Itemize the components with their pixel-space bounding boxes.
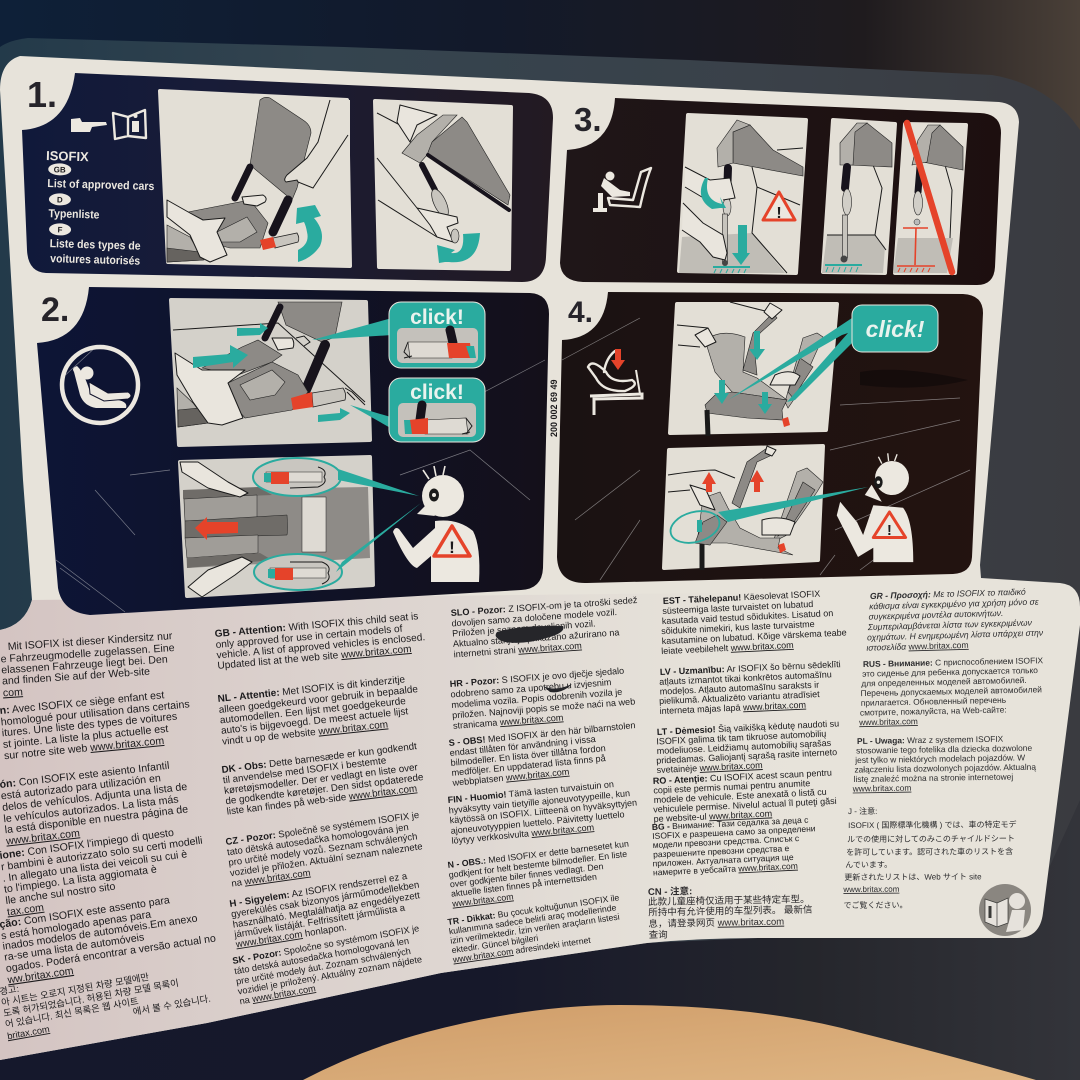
Lithuanian warning: svetainėje www.britax.com [656, 760, 763, 775]
ISOFIX car list legend: voitures autorisés [50, 253, 140, 268]
Japanese warning: でご覧ください。 [843, 900, 908, 910]
Norwegian warning: aktuelle listen finnes på internettsiden [450, 871, 597, 899]
Latvian warning: modeļos. Atļauto automašīnu saraksts ir [660, 680, 819, 697]
Hungarian warning [228, 869, 428, 951]
Slovenian warning: dovoljen samo za določene modele vozil. [451, 607, 617, 628]
Turkish warning: ektedir. Güncel bilgileri [451, 933, 539, 955]
warning triangle [763, 192, 795, 220]
Korean warning: 도록 허가되었습니다. 허용된 차량 모델 목록이 [2, 977, 179, 1019]
Greek warning: κάθισμα είναι εγκεκριμένο για χρήση μόνο σε [869, 597, 1039, 611]
callout: click upper: click! [410, 306, 464, 329]
German warning: e Fahrzeugmodelle zugelassen. Eine [0, 642, 175, 665]
Estonian warning: sõidukite nimekiri, kus laste turvaistme [661, 619, 815, 636]
German warning [0, 630, 180, 699]
Hungarian warning: www.britax.com honlapon. [235, 922, 347, 950]
Portuguese warning [0, 888, 221, 987]
Korean warning: britax.com [6, 1024, 51, 1041]
callout: click upper [312, 302, 485, 368]
illustration: lift the ISOFIX arm [160, 91, 350, 266]
Greek warning [865, 586, 1046, 653]
red arrow left [195, 517, 238, 540]
Estonian warning: süsteemiga laste turvaistet on lubatud [662, 599, 813, 616]
Slovenian warning: Aktualno stanje je prikazano ažurirano na [453, 627, 621, 649]
Dutch warning: automodellen. Een lijst met goedgekeurde [219, 696, 407, 726]
teal curved arrow up [296, 205, 322, 262]
Dutch warning: vindt u op de website www.britax.com [222, 719, 389, 748]
Hungarian warning: használható. Megtalálhatja az engedélyezett [232, 890, 421, 931]
Turkish warning [446, 892, 628, 965]
English warning: only approved for use in certain models of [215, 624, 403, 651]
English warning: vehicle. A list of approved vehicles is enclosed. [216, 632, 426, 661]
Slovak warning: vozidiel je priložený. Aktuálny zoznam nájdete [237, 954, 423, 996]
Italian warning: lle anche sul nostro sito [5, 881, 116, 907]
Slovenian warning: internetni strani www.britax.com [453, 640, 582, 659]
Lithuanian warning: LT - Dėmesio! Šią vaikišką kėdutę naudoti su [657, 718, 839, 737]
Lithuanian warning: modeliuose. Leidžiamų automobilių sąrašas [657, 738, 832, 756]
Finnish warning: hyväksytty vain tietyille ajoneuvotyypeille, kun [448, 788, 630, 815]
Russian warning: Перечень допускаемых моделей автомобилей [860, 684, 1042, 698]
warnings column 2 [214, 611, 430, 1006]
illustration: lower carrier onto base [670, 302, 855, 436]
Greek warning: GR - Προσοχή: Με το ISOFIX το παιδικό [870, 587, 1026, 601]
Bulgarian warning: ISOFIX е разрешена само за определени [652, 823, 816, 841]
Swedish warning: webbplatsen www.britax.com [452, 767, 570, 788]
Italian warning: r bambini è autorizzato solo su certi modelli [0, 835, 203, 873]
panel 2: click the ISOFIX connectors [37, 287, 549, 615]
French warning [0, 687, 196, 762]
Korean warning: 아 시트는 오로지 지정된 차량 모델에만 [0, 971, 150, 1008]
ISOFIX car list legend: GB [54, 165, 66, 175]
Spanish warning: la está disponible en nuestra página de [4, 803, 189, 836]
French warning: homologué pour utilisation dans certains [0, 698, 190, 728]
Swedish warning [447, 720, 642, 788]
Bulgarian warning: BG - Внимание: Тази седалка за деца с [652, 815, 809, 832]
Spanish warning: está autorizado para utilización en [0, 772, 161, 802]
Polish warning: załączeniu lista dozwolonych pojazdów. Aktualną [854, 762, 1036, 775]
Latvian warning: LV - Uzmanību: Ar ISOFIX šo bērnu sēdeklīti [660, 659, 841, 677]
Slovak warning: SK - Pozor: Spoločne so systémom ISOFIX je [232, 923, 420, 966]
Polish warning [851, 733, 1039, 794]
step number 3: 3. [574, 101, 602, 138]
teal click beams [728, 318, 855, 402]
Greek warning: οχημάτων. Η ενημερωμένη λίστα υπάρχει στην [867, 627, 1044, 642]
Hungarian warning: gyerekülés csak bizonyos járműmodellekben [230, 880, 420, 920]
Polish warning: listę znaleźć można na stronie internetowej [853, 772, 1013, 784]
illustration: leg correctly planted [822, 120, 895, 273]
red cross-out bar [907, 123, 952, 272]
Portuguese warning: ogados. Poderá encontrar a versão actual no [5, 933, 217, 975]
Croatian warning: stranicama www.britax.com [453, 712, 564, 731]
Turkish warning: TR - Dikkat: Bu çocuk koltuğunun ISOFIX ile [447, 892, 620, 927]
Swedish warning: S - OBS! Med ISOFIX är den här bilbarnstolen [448, 720, 636, 748]
teal sight beams to ovals [336, 469, 421, 572]
Romanian warning: RO - Atenţie: Cu ISOFIX acest scaun pentru [653, 768, 832, 786]
Danish warning: til anvendelse med ISOFIX i bestemte [222, 755, 387, 786]
Hungarian warning: H - Sigyelem: Az ISOFIX rendszerrel ez a [229, 871, 408, 910]
ISOFIX car list legend [43, 148, 155, 268]
Bulgarian warning: разрешените превозни средства е [653, 843, 790, 859]
panel 4: click carrier onto base [557, 292, 983, 583]
Japanese warning: を許可しています。認可された車のリストを含 [846, 846, 1013, 857]
step number 1: 1. [27, 74, 57, 115]
Slovak warning: pre určité modely áut. Zoznam schválených [235, 946, 412, 987]
Lithuanian warning: ISOFIX galima tik tam tikruose automobilių [656, 729, 826, 747]
ISOFIX car list legend: Typenliste [48, 208, 100, 222]
Chinese warning: CN - 注意: [648, 885, 692, 898]
Finnish warning: FIN - Huomio! Tämä lasten turvaistuin on [447, 779, 614, 805]
Croatian warning: priložen. Najnoviji popis se može naći na web [452, 696, 636, 720]
German warning: and finden Sie auf der Web-site [2, 666, 150, 687]
Japanese warning: んでいます。 [845, 860, 892, 870]
serial number: 200 002 69 49 [549, 379, 559, 437]
Portuguese warning: ção: Com ISOFIX este assento para [0, 894, 171, 931]
Bulgarian warning: модели превозни средства. Списък с [652, 833, 800, 850]
Spanish warning: ón: Con ISOFIX este asiento Infantil [0, 760, 170, 791]
Spanish warning: delos de vehículos. Adjunta una lista de [2, 781, 188, 814]
Czech warning: tato dětská autosedačka homologována jen [226, 822, 409, 858]
illustration: leg incorrectly placed, crossed out [893, 123, 966, 273]
Slovenian warning: SLO - Pozor: Z ISOFIX-om je ta otroški sedež [450, 595, 638, 618]
wooden floor [303, 1005, 1036, 1080]
Czech warning: vozidel je přiložen. Aktuální seznam naleznete [229, 841, 423, 879]
Portuguese warning: ra-se uma lista de automóveis [3, 931, 145, 964]
Norwegian warning: N - OBS.: Med ISOFIX er dette barnesetet kun [447, 838, 629, 870]
icon: seat with support leg [593, 168, 651, 212]
Romanian warning: pe website-ul www.britax.com [653, 808, 772, 824]
Portuguese warning: inados modelos de automóveis.Em anexo [2, 912, 198, 953]
Czech warning [225, 810, 428, 890]
Portuguese warning: ww.britax.com [6, 965, 75, 987]
Finnish warning: löytyy verkkosivulta www.britax.com [451, 822, 595, 846]
Dutch warning: NL - Attentie: Met ISOFIX is dit kinderzitje [217, 674, 406, 705]
Japanese warning: www.britax.com [842, 885, 900, 894]
Korean warning: 에서 볼 수 있습니다. [132, 993, 211, 1017]
Hungarian warning: járművek listáját. Felfrissített járműlista a [233, 903, 407, 941]
teal rotate arrow [701, 178, 726, 209]
teal detail oval and beam [695, 515, 727, 545]
icon: carrier on base [588, 349, 642, 415]
warnings column 1 [0, 630, 221, 1041]
illustration: extend support leg: ! [776, 205, 782, 222]
Italian warning [0, 823, 212, 918]
duck with warning triangle [393, 466, 479, 582]
Dutch warning: auto's is bijgevoegd. De meest actuele lijst [221, 706, 409, 737]
Chinese warning: 查询 [649, 929, 668, 941]
illustration: push seat onto connectors [171, 300, 370, 445]
Italian warning: . In allegato una lista dei veicoli su cui è [2, 848, 188, 885]
teal curved arrow round [437, 233, 480, 263]
Norwegian warning: godkjent for helt bestemte bilmodeller. En liste [448, 849, 628, 880]
Romanian warning: modele de vehicule. Este anexată o listă cu [654, 787, 827, 805]
warnings column 3 [446, 595, 643, 965]
Croatian warning: odobreno samo za upotrebu u izvjesnim [450, 677, 612, 699]
French warning: itures. Une liste des types de voitures [1, 711, 178, 739]
Japanese warning: J - 注意: [848, 806, 877, 816]
Czech warning: CZ - Pozor: Společně se systémem ISOFIX je [225, 810, 420, 848]
Slovenian warning [450, 595, 643, 659]
Korean warning [0, 950, 212, 1041]
Chinese warning: 息，请登录网页 www.britax.com [648, 917, 784, 930]
Chinese warning: 所持中有允许使用的车型列表。 最新信 [648, 904, 813, 918]
Finnish warning: käytössä on ISOFIX. Liitteenä on hyväksyttyjen [449, 797, 637, 825]
duck with warning triangle [837, 453, 913, 562]
panel 3: support leg [560, 98, 1001, 285]
Italian warning: ione: Con ISOFIX l'impiego di questo [0, 827, 175, 862]
Chinese warning: 此款儿童座椅仅适用于某些特定车型。 [648, 893, 810, 908]
Bulgarian warning: намерите в уебсайта www.britax.com [653, 861, 798, 877]
step number 4: 4. [568, 296, 593, 329]
Chinese warning [648, 883, 816, 941]
Romanian warning [652, 767, 840, 824]
Latvian warning: pielikumā. Aktualizēto variantu atradīsiet [659, 689, 820, 706]
warnings column 4 [648, 587, 850, 941]
Estonian warning [659, 587, 850, 656]
Bulgarian warning [651, 814, 820, 877]
Danish warning [221, 740, 428, 818]
Estonian warning: EST - Tähelepanu! Käesolevat ISOFIX [663, 589, 820, 606]
Polish warning: jest tylko w niektórych modelach pojazdów. W [854, 752, 1025, 765]
Greek warning: Συμπεριλαμβάνεται λίστα των εγκεκριμένων [867, 617, 1033, 632]
warnings column 5 [842, 586, 1047, 910]
Croatian warning [449, 665, 639, 731]
illustration: squeeze the ISOFIX arm [375, 101, 511, 269]
Swedish warning: endast tillåten för användning i vissa [449, 734, 597, 758]
Swedish warning: medföljer. En uppdaterad lista finns på [451, 753, 607, 778]
Korean warning: 어 있습니다. 최신 목록은 웹 사이트 [4, 995, 140, 1029]
teal detail ovals [253, 458, 341, 496]
German warning: Mit ISOFIX ist dieser Kindersitz nur [7, 630, 173, 653]
Dutch warning: alleen goedgekeurd voor gebruik in bepaalde [218, 684, 419, 716]
Czech warning: na www.britax.com [231, 868, 311, 890]
Norwegian warning: www.britax.com [451, 891, 514, 909]
Italian warning: tax.com [6, 902, 45, 918]
Russian warning: это сиденье для ребенка допускается только [862, 665, 1038, 679]
icon: read the manual, duck with book in circle [979, 884, 1031, 936]
German warning: elassenen Fahrzeuge liegt bei. Den [1, 653, 168, 676]
German warning: com [2, 686, 23, 699]
Lithuanian warning [655, 718, 844, 775]
Polish warning: stosowanie tego fotelika dla dziecka dozwolone [856, 743, 1032, 756]
icon: pointing hand and info book [71, 110, 146, 139]
Turkish warning: kullanımına sadece belirli araç modellerinde [448, 902, 617, 936]
ISOFIX car list legend: F [57, 225, 63, 234]
ISOFIX car list legend: Liste des types de [49, 238, 141, 253]
Italian warning: to l'impiego. La lista aggiomata è [3, 863, 158, 896]
Norwegian warning [446, 838, 636, 909]
ISOFIX car list legend: D [57, 195, 63, 204]
Spanish warning [0, 758, 195, 848]
Danish warning: de godkendte køretøjer. Den sidst opdaterede [225, 772, 425, 807]
French warning: n: Avec ISOFIX ce siège enfant est [0, 689, 165, 717]
Finnish warning [447, 777, 642, 846]
English warning: Updated list at the web site www.britax.com [217, 644, 412, 672]
Russian warning: для определенных моделей автомобилей. [861, 675, 1027, 688]
French warning: sur notre site web www.britax.com [3, 735, 165, 762]
Estonian warning: leiate veebilehelt www.britax.com [661, 640, 794, 656]
Estonian warning: kasutada vaid testud sõidukites. Lisatud on [662, 608, 833, 626]
panel 1: approved cars list [22, 73, 553, 282]
Swedish warning: bilmodeller. En lista över tillåtna fordon [450, 743, 606, 768]
Latvian warning [658, 659, 845, 716]
French warning: st jointe. La liste la plus actuelle est [2, 723, 169, 751]
illustration: check connectors from above [180, 457, 373, 597]
duck with warning triangle: ! [887, 523, 892, 539]
Japanese warning: 更新されたリストは、Web サイト site [844, 872, 982, 882]
English warning [214, 611, 429, 672]
Croatian warning: modelima vozila. Popis odobrenih vozila je [451, 687, 623, 710]
ink blot over text [496, 626, 572, 692]
Czech warning: pro určité modely vozů. Seznam schválených [228, 831, 418, 869]
step number 2: 2. [41, 291, 69, 329]
Russian warning: смотрите, пожалуйста, на Web-сайте: [860, 705, 1007, 718]
Russian warning: RUS - Внимание: С приспособлением ISOFIX [863, 655, 1043, 669]
Danish warning: liste kan findes på web-side www.britax.com [226, 783, 418, 818]
Japanese warning: ルでの使用に対してのみこのチャイルドシート [847, 833, 1015, 844]
Latvian warning: interneta mājas lapā www.britax.com [659, 700, 806, 716]
Slovak warning: na www.britax.com [239, 983, 316, 1006]
icon: child seat in circle [62, 347, 138, 423]
Russian warning: www.britax.com [858, 716, 918, 727]
Estonian warning: kasutamine on lubatud. Kõige värskema teabe [662, 627, 847, 646]
duck with warning triangle: ! [449, 538, 455, 557]
Danish warning: køretøjsmodeller. Der er vedlagt en liste over [224, 762, 419, 797]
Russian warning: прилагается. Обновленный перечень [861, 695, 1007, 708]
Polish warning: www.britax.com [852, 783, 911, 794]
Portuguese warning: s está homologado apenas para [0, 909, 152, 942]
Greek warning: συγκεκριμένα μοντέλα αυτοκινήτων. [868, 608, 1003, 622]
callout: click lower [350, 378, 485, 442]
Turkish warning: izin verilmektedir. İzin verilen araçların listesi [450, 912, 620, 946]
illustration: extend support leg [679, 115, 806, 273]
ISOFIX car list legend: List of approved cars [47, 178, 154, 193]
red up arrows [702, 472, 716, 492]
teal push arrows [193, 345, 248, 368]
Russian warning [857, 655, 1047, 727]
Romanian warning: vehiculele permise. Nivelul actual îl puteţi găsi [653, 796, 837, 815]
Japanese warning: ISOFIX ( 国際標準化機構 ) では、車の特定モデ [848, 819, 1017, 830]
Bulgarian warning: приложен. Актуалната ситуация ще [652, 852, 794, 869]
Lithuanian warning: pridedamas. Galiojantį sąrašą rasite interneto [656, 747, 837, 766]
ISOFIX car list legend: ISOFIX [46, 148, 89, 164]
Turkish warning: www.britax.com adresindeki internet [452, 935, 591, 965]
Polish warning: PL - Uwaga: Wraz z systemem ISOFIX [857, 734, 1003, 746]
Japanese warning [842, 805, 1019, 910]
callout: click lower: click! [410, 381, 464, 404]
Slovak warning [232, 923, 430, 1006]
Greek warning: ιστοσελίδα www.britax.com [866, 640, 969, 653]
Danish warning: DK - Obs: Dette barnesæde er kun godkendt [221, 741, 417, 776]
teal down arrows [749, 331, 765, 360]
illustration: pull handle to check lock [664, 446, 868, 570]
Slovenian warning: Priložen je seznam dovoljenih vozil. [452, 618, 596, 638]
Dutch warning [217, 673, 425, 748]
callout: click: click! [866, 316, 925, 342]
English warning: GB - Attention: With ISOFIX this child seat is [214, 611, 419, 640]
Latvian warning: atļauts izmantot tikai konkrētos automašīnu [659, 669, 832, 687]
callout: click [852, 305, 938, 352]
Spanish warning: le vehículos autorizados. La lista más [3, 793, 179, 825]
Spanish warning: www.britax.com [4, 827, 81, 848]
Norwegian warning: over godkjente biler finnes vedlagt. Den [449, 861, 604, 889]
Slovak warning: táto detská autosedačka homologovaná len [233, 936, 410, 976]
Croatian warning: HR - Pozor: S ISOFIX je ovo dječje sjedalo [449, 666, 625, 689]
teal down arrow [732, 225, 750, 265]
Finnish warning: ajoneuvotyyppien luettelo. Päivitetty luettelo [450, 809, 625, 836]
Romanian warning: copii este permis numai pentru anumite [653, 778, 810, 795]
